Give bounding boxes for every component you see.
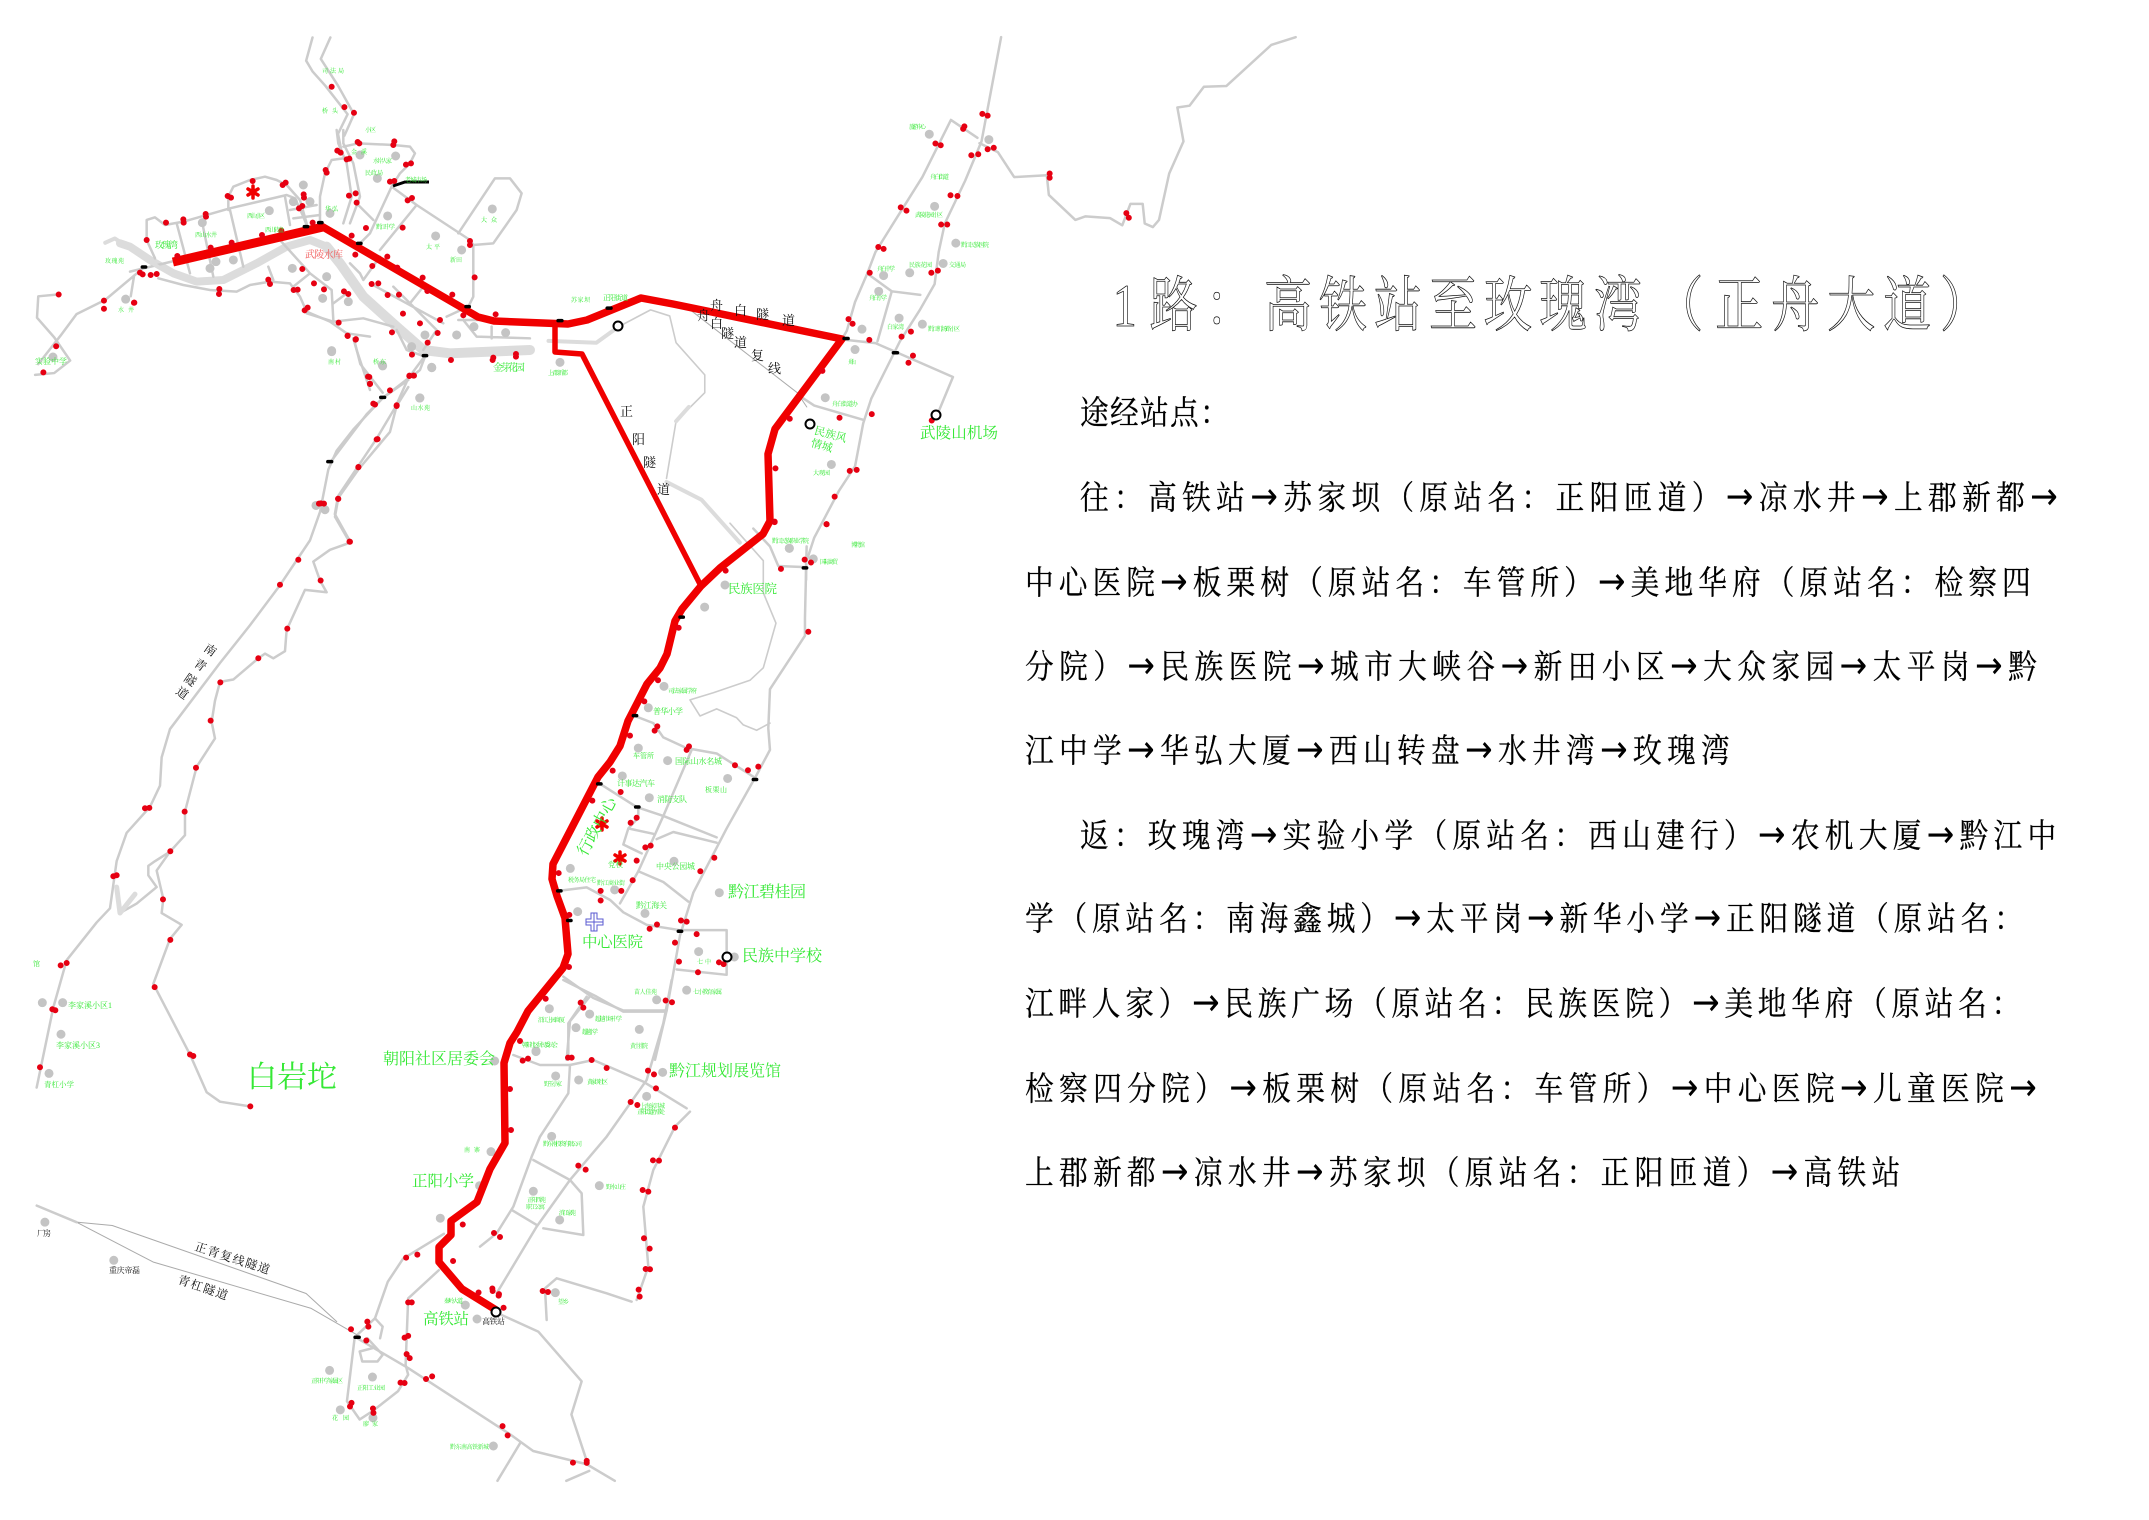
map labels: small green place names: 上郡新都 (548, 369, 568, 377)
map labels: small green place names: 水岸人家 (373, 157, 392, 165)
tunnel: Nanqing: 道 (173, 684, 191, 702)
tunnel: Zhengyang: 正 (620, 404, 633, 419)
map: road network (35, 37, 1296, 1481)
tunnel: Nanqing: 隧 (181, 671, 200, 690)
stops: north-east (775, 114, 1129, 524)
map labels: small green place names: 青杠小学 (44, 1079, 74, 1089)
map labels: small green place names: 舟山 (848, 358, 856, 366)
tunnel: Zhengyang: 道 (657, 482, 670, 497)
map: grey location pins (42, 134, 989, 1446)
map labels: small green place names: 旅游中心 (909, 123, 927, 131)
map labels: small green place names: 国际商贸 (820, 558, 839, 566)
tunnel: Zhoubai second line: 隧 (721, 326, 735, 341)
map labels: small green place names: 华弘 (325, 205, 339, 213)
return: line 3: 江畔人家）→民族广场（原站名：民族医院）→美地华府（原站名： (1025, 981, 2020, 1025)
map labels: small green place names: 舟白中学 (877, 265, 895, 273)
markers: station area (355, 1335, 359, 1339)
return: line 2: 学（原站名：南海鑫城）→太平岗→新华小学→正阳隧道（原站名： (1025, 896, 2023, 940)
map labels: small green place names: 白家湾 (887, 323, 904, 331)
map labels: small green place names: 山水苑 (411, 404, 430, 412)
label: Qianjiang planning hall: 黔江规划展览馆 (669, 1062, 781, 1080)
pins: station area (45, 1186, 493, 1446)
markers: north-east (844, 338, 897, 353)
map labels: small green place names: 南村 (328, 358, 341, 366)
map labels: small green place names: 西山小区 (247, 212, 265, 220)
roads: high-speed station area (37, 1206, 615, 1481)
tunnel: Zhengyang: 隧 (643, 455, 657, 470)
map labels: small green place names: 桥头 (322, 107, 339, 115)
map labels: small green place names: 苗人佳苑 (634, 988, 657, 996)
map labels: small green place names: 实验中学 (35, 356, 67, 366)
map labels: small green place names: 博物馆 (851, 541, 865, 549)
map labels: small green place names: 野玉小家 (544, 1080, 562, 1088)
map labels: small green place names: 廖家 (363, 1420, 378, 1428)
map labels: small green place names: 黔江中学 (376, 223, 395, 231)
route stops text block (1025, 394, 2058, 1194)
label: Qianjiang Country Garden: 黔江碧桂园 (728, 883, 806, 901)
stops: south (493, 1041, 675, 1297)
outbound: line 3: 分院）→民族医院→城市大峡谷→新田小区→大众家园→太平岗→黔 (1025, 644, 2037, 688)
title: ） (1940, 273, 1988, 339)
title: 高铁站至玫瑰湾 (1264, 273, 1649, 339)
label: small station name: 高铁站 (482, 1316, 505, 1326)
label: Chongqing Dilei: 重庆帝磊 (109, 1265, 140, 1275)
return: line 1: 返：玫瑰湾→实验小学（原站名：西山建行）→农机大厦→黔江中 (1080, 813, 2056, 857)
tunnel: Zhengyang (620, 404, 670, 497)
map labels: small green place names: 板栗山 (705, 785, 727, 794)
map labels: small green place names: 玫瑰苑 (105, 257, 124, 265)
tunnel: Nanqing: 青 (191, 655, 210, 674)
tunnel: Zhengqing second line: 正青复线隧道 (193, 1239, 272, 1277)
stops: station area (350, 1224, 587, 1463)
map labels: small green place names: 司法局 (322, 67, 344, 75)
map: black junction markers (142, 223, 897, 1337)
roads: southern district (480, 980, 690, 1320)
red star: administrative centre (597, 818, 607, 830)
label: factory: 厂房 (37, 1228, 51, 1238)
map labels: small green place names: 超越小学 (582, 1028, 598, 1036)
map labels: small green place names: 黔东南投资有限公司 (543, 1140, 582, 1148)
map labels: small green place names: 武陵花园小区 (915, 211, 943, 219)
label: Wulingshan airport: 武陵山机场 (920, 424, 998, 442)
map labels: black tunnel names (37, 298, 795, 1326)
pins: south (491, 1051, 663, 1293)
map labels: small green place names: 舟白街道办 (832, 400, 859, 408)
black stub road (393, 182, 429, 186)
map labels: small green place names: 税务局住宅 (568, 876, 596, 884)
map labels: small green place names: 民政局 (365, 169, 383, 177)
map labels: small green place names: 司法家属学府 (668, 687, 697, 695)
title: 正舟大道 (1715, 273, 1939, 339)
route Zhengyang tunnel branch (555, 323, 701, 586)
title: ： (1206, 273, 1254, 339)
markers: north and south roads (328, 308, 611, 462)
tunnel: Zhoubai: 隧 (756, 307, 770, 322)
subheading: stops: 途经站点： (1080, 394, 1229, 431)
label: Chaoyang community: 朝阳社区居委会 (383, 1050, 495, 1068)
tunnel: Zhoubai second line: 复 (751, 348, 764, 363)
map labels: small green place names: 南寨 (464, 1146, 480, 1154)
map labels: small green place names (33, 67, 989, 1451)
tunnel: Zhoubai second line: 白 (710, 316, 723, 331)
red star: party school (615, 852, 625, 864)
map labels: small green place names: 正阳工业园 (357, 1384, 385, 1392)
map labels: small green place names: 金溪 (351, 148, 367, 156)
map labels: small green place names: 西山转盘 (265, 226, 284, 234)
label: ethnic style town: 情城 (810, 436, 834, 455)
map labels: small green place names: 民族花园 (909, 261, 932, 269)
map labels: small green place names: 老城市场 (405, 176, 427, 184)
label: Wuling reservoir: 武陵水库 (305, 248, 343, 261)
map labels: small green place names: 正阳街道办事处 (637, 1108, 665, 1116)
markers: central (558, 568, 807, 931)
route thicker west section (173, 227, 323, 262)
label: ethnic middle school: 民族中学校 (742, 947, 823, 965)
map labels: small green place names: 秦岭大道 (444, 1297, 463, 1305)
title: （ (1655, 273, 1703, 339)
map labels: small green place names: 车管所 (633, 751, 654, 760)
map labels: small green place names: 黔江民族职业学院 (772, 537, 809, 545)
map labels: small green place names: 国际山水名城 (675, 756, 722, 766)
stops: west tunnel roads (40, 384, 397, 1106)
stops: city (134, 141, 516, 384)
label: ethnic style town: 民族风 (813, 424, 848, 445)
map labels: small green place names: 西山水井 (195, 231, 217, 239)
title: 路 (1150, 273, 1198, 339)
roads: far north and west spur (35, 37, 807, 543)
map labels: small green place names: 黔东南高铁新城 (450, 1443, 489, 1451)
map labels: small green place names: 新田 (450, 256, 462, 264)
label: ethnic hospital: 民族医院 (728, 582, 777, 596)
pins: north-west (53, 299, 560, 398)
map labels: small green place names: 大观园 (813, 469, 830, 477)
map labels: small green place names: 水井 (118, 306, 134, 314)
roads: north-east corridor and mountain road (798, 37, 1296, 580)
pins: city (202, 155, 506, 367)
map labels: small green place names: 李家溪小区1 (68, 1000, 112, 1010)
map labels: small green place names: 上海家具城 (640, 1102, 665, 1110)
pins: north-east (789, 134, 989, 548)
label: high-speed station: 高铁站 (423, 1309, 469, 1328)
map labels: small green place names: 正阳西苑 (527, 1196, 546, 1204)
map labels: small green place names: 舟白街道 (930, 173, 949, 181)
tunnel: Zhoubai: 道 (782, 313, 795, 328)
label: central hospital: 中心医院 (582, 933, 643, 951)
map labels: small green place names: 七小教育家属 (693, 988, 722, 996)
tunnel: Zhengyang: 阳 (632, 432, 645, 447)
map labels: small green place names: 馆 (33, 959, 40, 968)
map labels: small green place names: 大众 (481, 216, 497, 224)
map labels: small green place names: 黄家坝社区 (587, 1078, 608, 1086)
map labels: small green place names: 小区 (365, 126, 376, 134)
tunnel: Zhoubai second line: 道 (734, 335, 747, 350)
map labels: large green place names (155, 239, 998, 1328)
map labels: small green place names: 黔江民族医院 (961, 241, 989, 249)
map: bus route 1 thick red line (173, 227, 842, 1310)
roads: north-west city (120, 130, 530, 390)
map labels: small green place names: 桥东 (373, 358, 386, 366)
pins: west (42, 398, 420, 1073)
return: line 5: 上郡新都→凉水井→苏家坝（原站名：正阳匝道）→高铁站 (1025, 1150, 1900, 1194)
tunnel: Zhoubai: 舟 (710, 298, 723, 313)
map labels: small green place names: 滨江家苑 (559, 1209, 576, 1217)
map labels: small green place names: 黔江海关 (636, 900, 667, 910)
tunnel: Zhoubai second line: 线 (768, 361, 781, 376)
map labels: small green place names: 职工公寓 (526, 1203, 545, 1211)
map labels: small green place names: 太平 (426, 243, 440, 251)
icon: blue hospital cross (586, 913, 603, 931)
map labels: small green place names: 消防支队 (657, 794, 687, 804)
map labels: small green place names: 正阳街道 (603, 293, 628, 302)
label: Zhengyang primary school: 正阳小学 (412, 1172, 474, 1190)
map labels: small green place names: 超越市场中学 (595, 1015, 622, 1023)
label: administrative centre: 行政中心 (574, 793, 621, 859)
pins: central (536, 548, 813, 1052)
outbound: line 4: 江中学→华弘大厦→西山转盘→水井湾→玫瑰湾 (1025, 728, 1730, 772)
tunnel: Nanqing (173, 640, 220, 702)
stops: central (546, 522, 827, 1008)
map labels: small green place names: 苏家坝 (571, 296, 591, 304)
map labels: small green place names: 普华小学 (653, 706, 683, 716)
red star: north-west landmark (248, 186, 258, 198)
outbound: line 2: 中心医院→板栗树（原站名：车管所）→美地华府（原站名：检察四 (1025, 560, 2031, 604)
map labels: small green place names: 计事达汽车 (617, 778, 655, 788)
map labels: small green place names: 黔江商业街 (597, 879, 625, 887)
map labels: small green place names: 李家溪小区3 (56, 1040, 100, 1050)
label: Baiyantuo: 白岩坨 (247, 1061, 337, 1094)
map labels: small green place names: 黔江机场路小区 (928, 325, 960, 333)
tunnel: Qinggang: 青杠隧道 (176, 1272, 230, 1303)
map labels: small green place names: 黄土社院 (630, 1042, 648, 1050)
tunnel: Zhoubai (710, 298, 795, 328)
roads: west long tunnel roads (37, 380, 408, 1106)
map labels: small green place names: 中央公园城 (656, 861, 695, 871)
label: Jinya garden: 金芽花园 (493, 361, 525, 374)
stops: north-west (43, 87, 413, 542)
icon: station ring markers (492, 322, 940, 1316)
label: Meigui Bay: 玫瑰湾 (155, 239, 178, 250)
map labels: small green place names: 交通局 (949, 261, 966, 269)
return: line 4: 检察四分院）→板栗树（原站名：车管所）→中心医院→儿童医院→ (1025, 1066, 2037, 1110)
title: 1 (1113, 273, 1137, 339)
route main line (173, 227, 842, 1310)
roads: central district (558, 523, 807, 1060)
map labels: small green place names: 七中 (697, 958, 711, 966)
outbound: line 1: 往：高铁站→苏家坝（原站名：正阳匝道）→凉水井→上郡新都→ (1080, 475, 2058, 519)
markers: city (142, 223, 469, 356)
map labels: small green place names: 沿江上园商厦 (538, 1016, 565, 1024)
map labels: small green place names: 花园 (332, 1414, 349, 1422)
tunnel: Zhoubai: 白 (734, 303, 747, 318)
tunnel: Zhoubai second line: 舟 (697, 308, 710, 323)
map labels: small green place names: 党校 (608, 859, 624, 869)
label: ethnic style town (810, 424, 848, 458)
map labels: small green place names: 正阳中学家属区 (311, 1377, 343, 1385)
tunnel: Nanqing: 南 (201, 640, 220, 659)
map: red bus stops (40, 87, 1129, 1463)
map labels: small green place names: 朝阳社区居民委员会 (522, 1041, 558, 1049)
map labels: small green place names: 野水山庄 (606, 1183, 626, 1191)
map labels: small green place names: 舟白小学 (869, 294, 887, 302)
map labels: small green place names: 望乡 (558, 1298, 569, 1306)
tunnel: Zhoubai second line (697, 308, 781, 376)
